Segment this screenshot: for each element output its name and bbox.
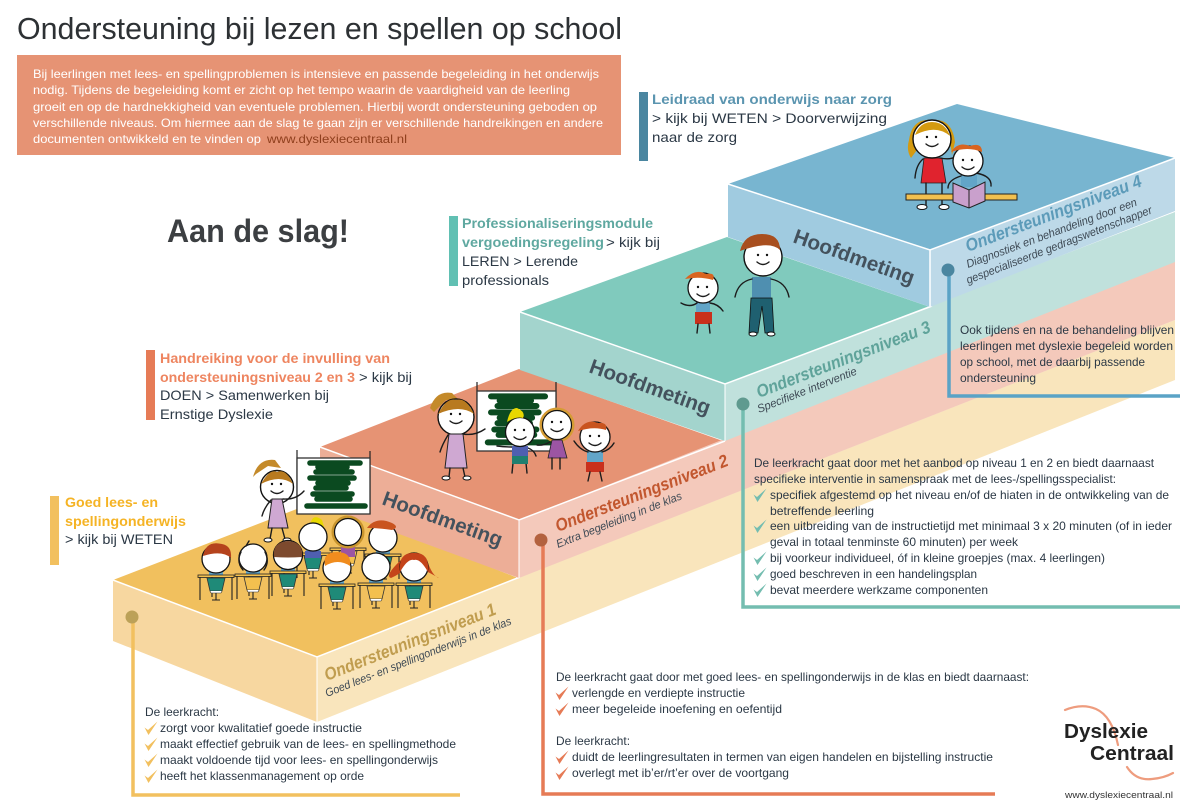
heading: Aan de slag: Aan de slag!	[167, 213, 349, 249]
callout: niveau 3: specifieke interventie in samenspraak met de lees-/spellingsspecialist:	[754, 472, 1116, 486]
note: Goed lees- en spellingonderwijs: Goed lees- en	[65, 494, 158, 510]
callout: niveau 2: De leerkracht gaat door met goed lees- en spellingonderwijs in de klas en biedt daarnaast:	[556, 670, 1029, 684]
callout: niveau 3	[736, 398, 1180, 607]
callout: niveau 1: De leerkracht:	[145, 705, 219, 719]
panel: intro text box	[17, 55, 621, 155]
callout: niveau 3: bij voorkeur individueel, óf in kleine groepjes (max. 4 leerlingen)	[770, 551, 1105, 565]
callout: niveau 2: duidt de leerlingresultaten in termen van eigen handelen en bijstelling instructie	[572, 750, 993, 764]
note: Professionaliseringsmodule: > kijk bij	[606, 234, 660, 250]
label: niveau 1: Ondersteuningsniveau 1	[321, 599, 499, 685]
note: Professionaliseringsmodule: Professionaliseringsmodule	[462, 215, 653, 231]
label: niveau 2: Ondersteuningsniveau 2	[552, 450, 731, 536]
note: Handreiking: DOEN > Samenwerken bij	[160, 387, 329, 403]
illustration: classroom teacher and board	[253, 450, 370, 542]
callout: niveau 1: heeft het klassenmanagement op orde	[160, 769, 364, 783]
note: Goed lees- en spellingonderwijs: spellingonderwijs	[65, 513, 186, 529]
label: niveau 3: Ondersteuningsniveau 3	[753, 317, 933, 402]
note: Goed lees- en spellingonderwijs	[50, 494, 186, 565]
label: niveau 1: Goed lees- en spellingonderwijs in de klas	[324, 616, 513, 700]
note: Professionaliseringsmodule: vergoedingsregeling	[462, 234, 604, 250]
callout: niveau 2: De leerkracht:	[556, 734, 630, 748]
callout: niveau 4: ondersteuning	[960, 371, 1036, 385]
panel: intro text box: groeit en op de hardnekkigheid van eventuele problemen. Hierbij wordt ondersteuning geboden op	[33, 100, 597, 114]
step 2: salmon block	[320, 261, 1175, 578]
logo: Dyslexie Centraal: www.dyslexiecentraal.nl	[1064, 790, 1173, 801]
panel: intro text box: nodig. Tijdens de begeleiding komt er zicht op het tempo waarin de vaardigheid van de leerling	[33, 83, 570, 97]
label: niveau 3: Specifieke interventie	[756, 366, 859, 416]
logo: Dyslexie Centraal	[1064, 706, 1174, 801]
logo: Dyslexie Centraal: Dyslexie	[1064, 721, 1148, 743]
title: Ondersteuning bij lezen en spellen op school	[17, 11, 622, 46]
note: Professionaliseringsmodule: LEREN > Lerende	[462, 253, 578, 269]
note: Handreiking: Ernstige Dyslexie	[160, 406, 273, 422]
callout: niveau 2: overlegt met ib’er/rt’er over de voortgang	[572, 766, 789, 780]
callout: niveau 3: betreffende leerling	[770, 504, 874, 518]
panel: intro text box: Bij leerlingen met lees- en spellingproblemen is intensieve en passende begeleiding in het onderwijs	[33, 67, 599, 81]
label: niveau 2: Extra begeleiding in de klas	[555, 490, 684, 551]
note: Leidraad: > kijk bij WETEN > Doorverwijzing	[652, 110, 887, 126]
callout: niveau 4: op school, met de daarbij passende	[960, 355, 1145, 369]
panel: intro text box: verschillende niveaus. Om hiermee aan de slag te gaan zijn er verschillende handreikingen en andere	[33, 116, 603, 130]
callout: niveau 3: De leerkracht gaat door met het aanbod op niveau 1 en 2 en biedt daarnaast	[754, 456, 1155, 470]
callout: niveau 3: bevat meerdere werkzame componenten	[770, 583, 988, 597]
callout: niveau 3: specifiek afgestemd op het niveau en/of de hiaten in de ontwikkeling van de	[770, 488, 1169, 502]
callout: niveau 1: maakt effectief gebruik van de lees- en spellingmethode	[160, 737, 456, 751]
callout: niveau 3: een uitbreiding van de instructietijd met minimaal 3 x 20 minuten (of in ieder	[770, 519, 1172, 533]
callout: niveau 3: goed beschreven in een handelingsplan	[770, 567, 977, 581]
note: Handreiking: Handreiking voor de invulling van	[160, 350, 390, 366]
callout: niveau 1	[126, 610, 460, 795]
step 1: yellow block	[113, 320, 1175, 722]
step 3: teal block	[520, 212, 1175, 441]
illustration: students at desks	[198, 517, 439, 609]
note: Handreiking: > kijk bij	[359, 369, 412, 385]
panel: intro text box: www.dyslexiecentraal.nl	[266, 132, 407, 146]
note: Leidraad: Leidraad van onderwijs naar zorg	[652, 91, 892, 107]
step 4: blue block	[728, 104, 1175, 307]
note: Goed lees- en spellingonderwijs: > kijk bij WETEN	[65, 531, 173, 547]
label: Hoofdmeting on blue: Hoofdmeting	[790, 225, 918, 290]
label: niveau 4: Ondersteuningsniveau 4	[962, 171, 1145, 256]
illustration: two children on teal step	[681, 234, 789, 336]
label: niveau 4: Diagnostiek en behandeling door een	[965, 197, 1139, 271]
note: Handreiking	[146, 350, 412, 422]
note: Professionaliseringsmodule	[449, 215, 660, 288]
callout: niveau 1: zorgt voor kwalitatief goede instructie	[160, 721, 362, 735]
callout: niveau 4	[942, 264, 1180, 396]
callout: niveau 4: leerlingen met dyslexie begeleid worden	[960, 339, 1173, 353]
label: Hoofdmeting on teal: Hoofdmeting	[586, 355, 714, 420]
callout: niveau 2	[534, 534, 1029, 794]
callout: niveau 1: maakt voldoende tijd voor lees- en spellingonderwijs	[160, 753, 438, 767]
note: Leidraad	[639, 91, 892, 161]
illustration: teacher with small group	[430, 382, 614, 481]
note: Professionaliseringsmodule: professionals	[462, 272, 549, 288]
panel: intro text box: documenten ontwikkeld en te vinden op	[33, 132, 261, 146]
label: niveau 4: gespecialiseerde gedragswetenschapper	[965, 204, 1155, 287]
callout: niveau 4: Ook tijdens en na de behandeling blijven	[960, 323, 1174, 337]
note: Leidraad: naar de zorg	[652, 129, 737, 145]
note: Handreiking: ondersteuningsniveau 2 en 3	[160, 369, 355, 385]
callout: niveau 2: verlengde en verdiepte instructie	[572, 686, 745, 700]
callout: niveau 2: meer begeleide inoefening en oefentijd	[572, 702, 782, 716]
illustration: adult and child reading on bench	[906, 120, 1017, 210]
label: Hoofdmeting on salmon: Hoofdmeting	[379, 487, 506, 552]
logo: Dyslexie Centraal: Centraal	[1090, 743, 1174, 765]
callout: niveau 3: geval in totaal tenminste 60 minuten) per week	[770, 535, 1019, 549]
